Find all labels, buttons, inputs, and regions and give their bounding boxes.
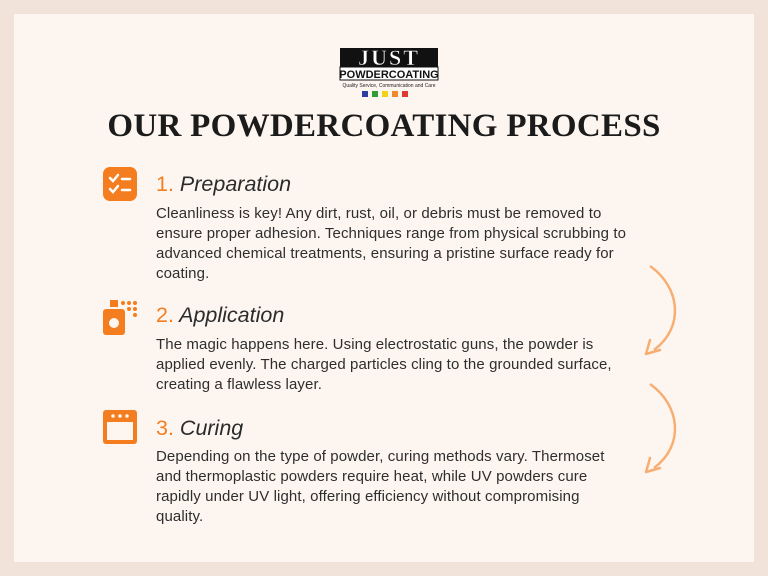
- heading 1: 1. Preparation: [156, 172, 291, 196]
- title: OUR POWDERCOATING PROCESS: [107, 108, 661, 144]
- text 3: quality.: [156, 508, 203, 525]
- logo: Quality Service, Communication and Care: [342, 83, 436, 89]
- text 2: [156, 336, 612, 393]
- icon: oven: [103, 410, 137, 444]
- text 1: Cleanliness is key! Any dirt, rust, oil, or debris must be removed to: [156, 205, 601, 222]
- text 2: applied evenly. The charged particles cling to the grounded surface,: [156, 356, 612, 373]
- logo: POWDERCOATING: [339, 69, 439, 81]
- text 3: rapidly under UV light, offering efficiency without compromising: [156, 488, 580, 505]
- text 3: Depending on the type of powder, curing methods vary. Thermoset: [156, 448, 604, 465]
- text 1: ensure proper adhesion. Techniques range from physical scrubbing to: [156, 225, 626, 242]
- text 1: coating.: [156, 265, 209, 282]
- text 3: and thermoplastic powders require heat, while UV powders cure: [156, 468, 587, 485]
- logo: [339, 46, 439, 97]
- heading 3: 3. Curing: [156, 416, 243, 440]
- heading 2: 2. Application: [156, 303, 284, 327]
- icon: checklist: [103, 167, 137, 201]
- text 2: creating a flawless layer.: [156, 376, 322, 393]
- text 1: [156, 205, 626, 282]
- text 2: The magic happens here. Using electrostatic guns, the powder is: [156, 336, 593, 353]
- icon: spray: [103, 300, 137, 335]
- text 1: advanced chemical treatments, ensuring a pristine surface ready for: [156, 245, 614, 262]
- arrow 2: [644, 383, 676, 474]
- arrow 1: [644, 265, 676, 356]
- text 3: [156, 448, 604, 525]
